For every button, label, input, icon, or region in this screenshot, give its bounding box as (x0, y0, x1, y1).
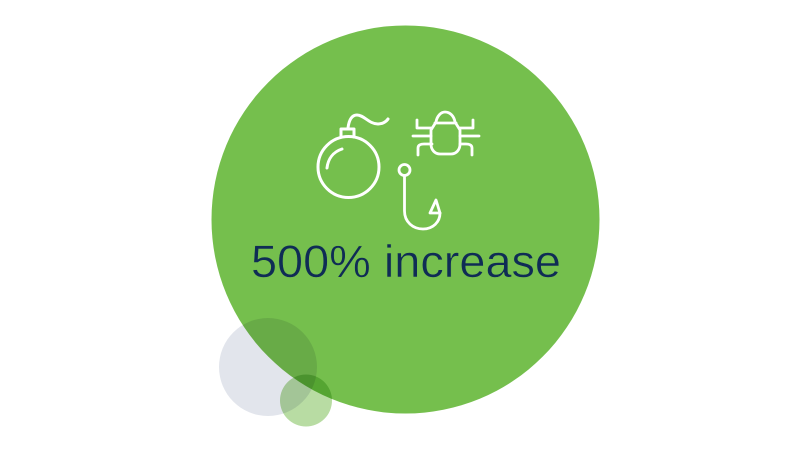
icon: bug (413, 112, 479, 155)
large green circle (212, 26, 600, 414)
translucent grey circle (219, 318, 317, 416)
icon: bomb (318, 115, 388, 198)
translucent small green circle (280, 374, 332, 426)
headline: 500% increase (251, 236, 561, 287)
icon: fish hook (399, 164, 440, 229)
